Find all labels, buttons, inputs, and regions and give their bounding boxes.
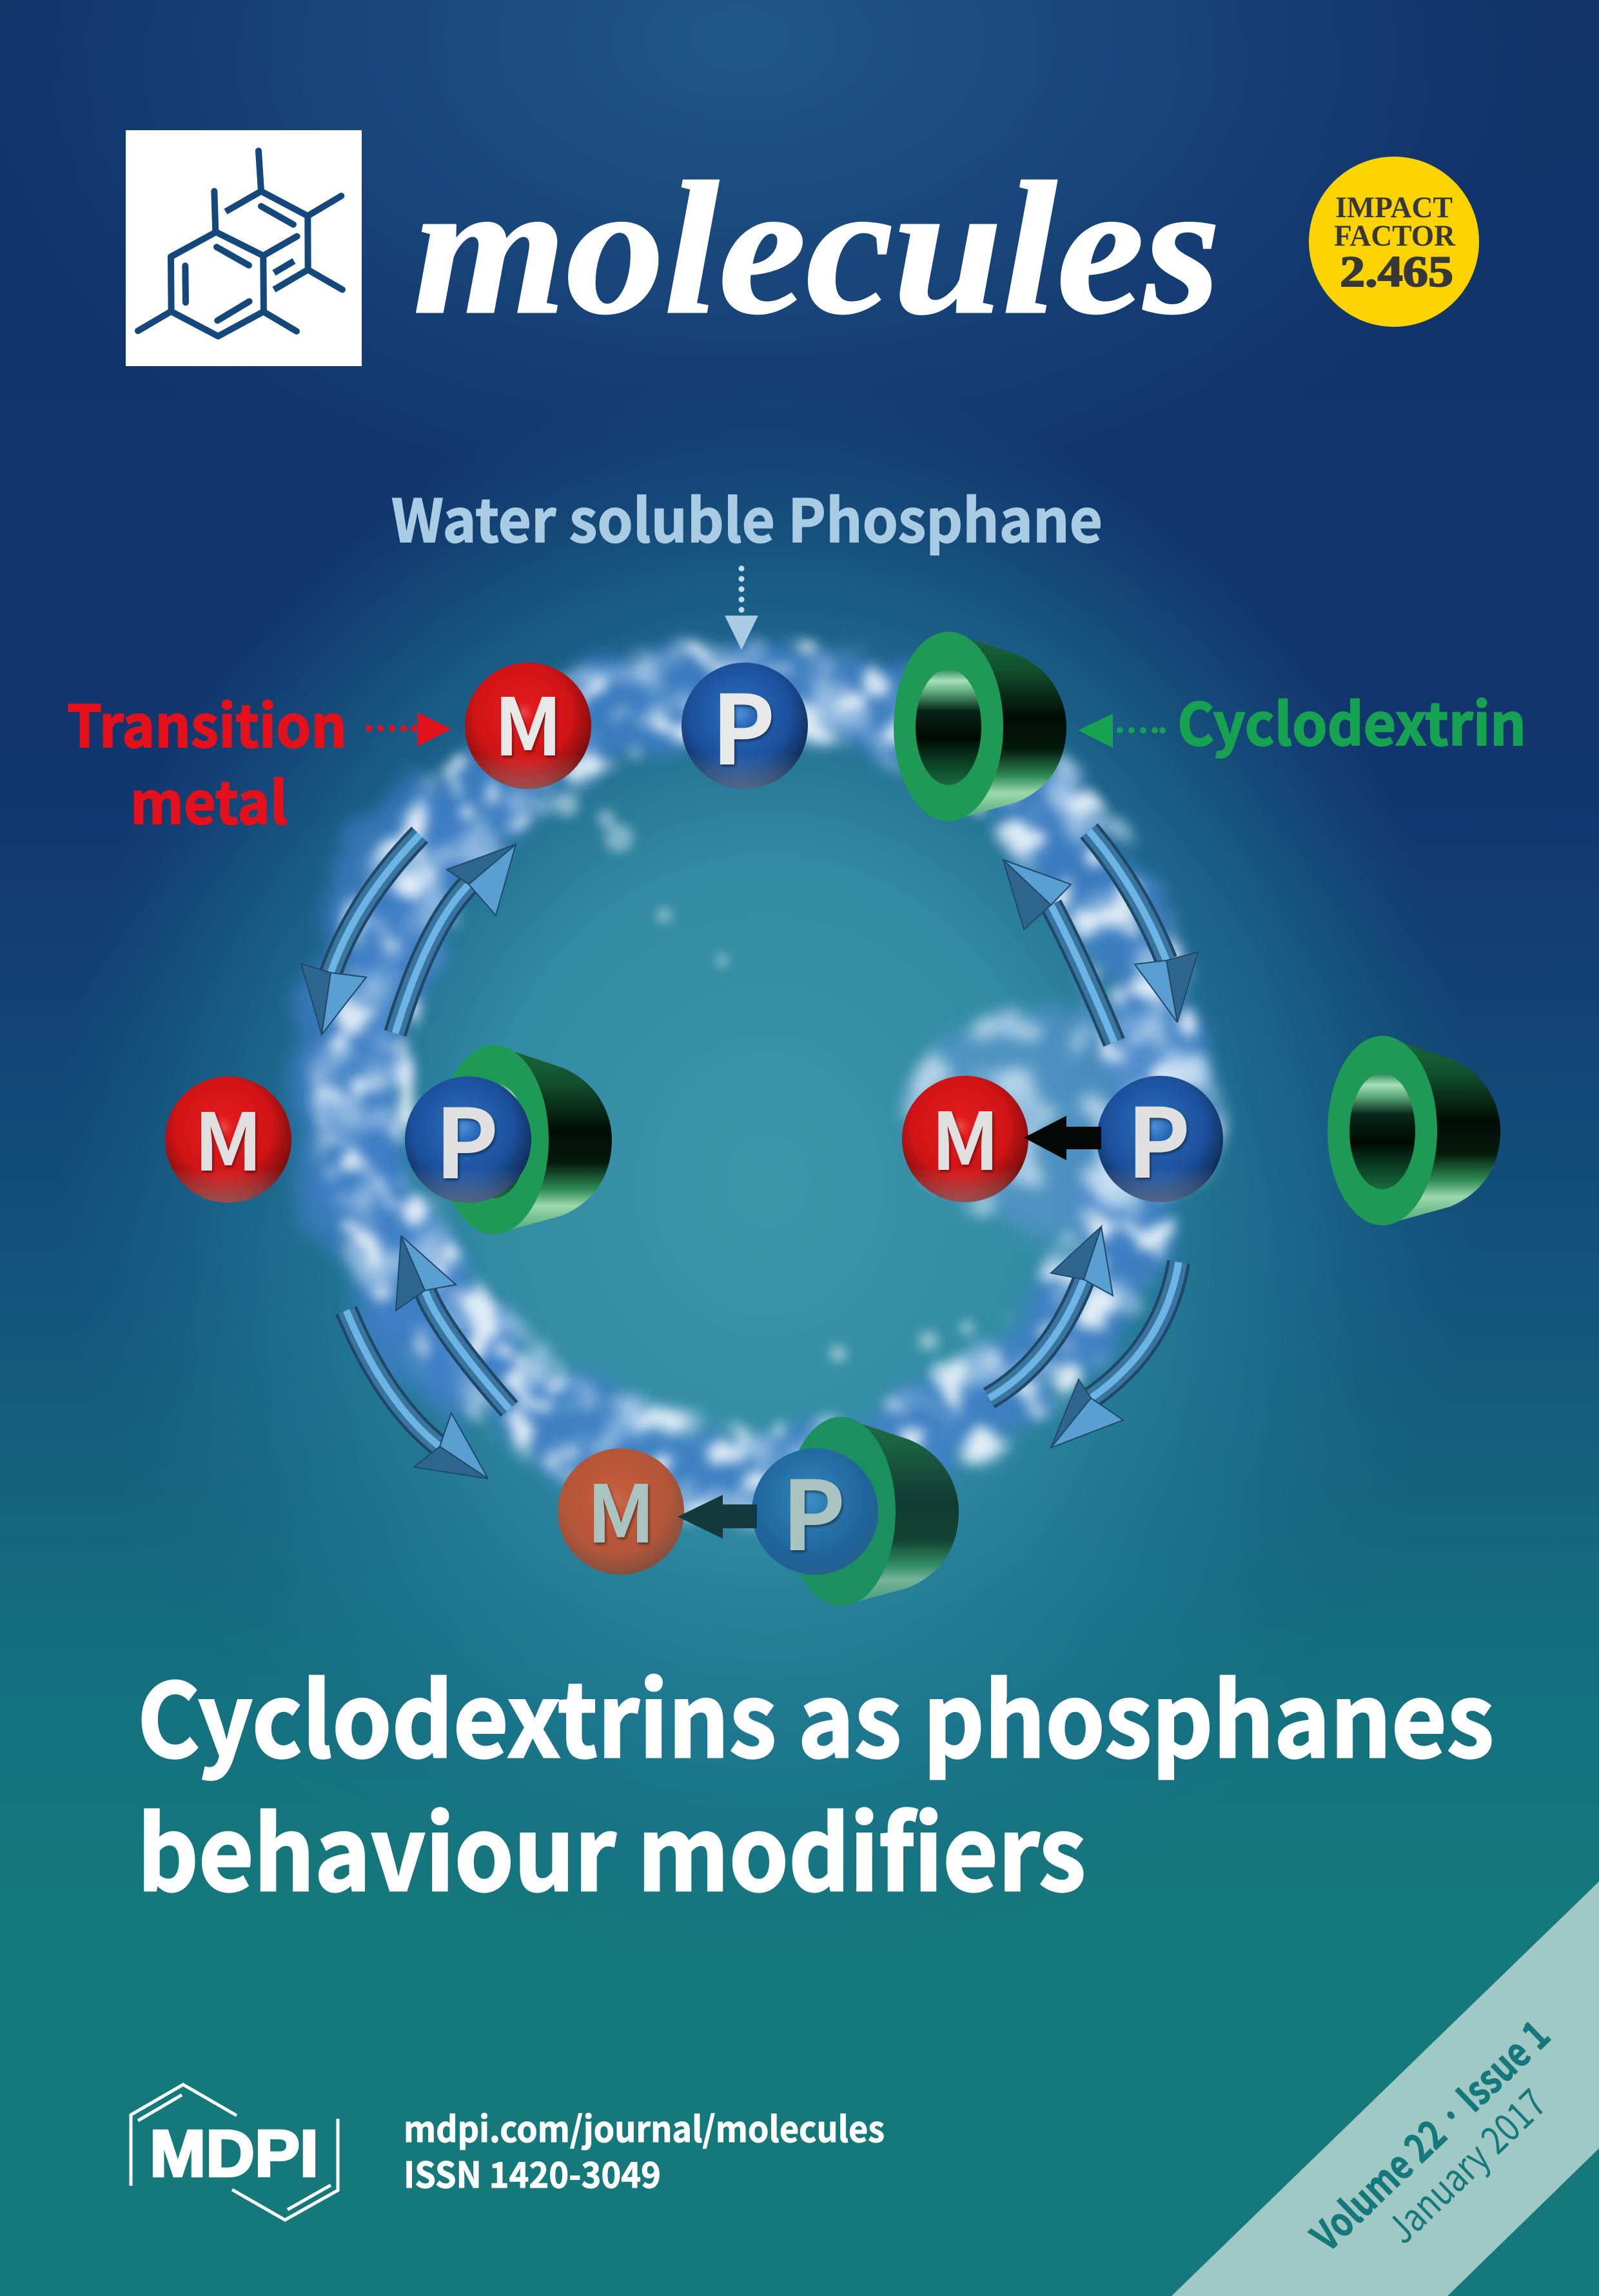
arrow: cyclodextrin pointer [1078, 714, 1166, 748]
sphere: metal left [165, 1076, 291, 1203]
sphere: metal left: M [194, 1079, 262, 1194]
impact factor badge [1309, 157, 1479, 327]
curved arrow: bottom-left inner [396, 1236, 509, 1409]
label: transition metal [67, 680, 347, 841]
impact factor badge: 2.465 [1340, 247, 1453, 296]
sphere: phosphane top [682, 653, 808, 792]
impact factor badge: IMPACT [1335, 191, 1453, 224]
water ring [343, 686, 1225, 1473]
curved arrow: top-right outer [1089, 831, 1198, 1022]
sphere: metal right [902, 1076, 1028, 1202]
label: transition metal: Transition [67, 680, 347, 764]
sphere: metal top [465, 663, 591, 789]
panel: reaction cycle [67, 474, 1526, 1606]
headline: Cyclodextrins as phosphanes [137, 1639, 1494, 1787]
curved arrow: top-right inner [1003, 860, 1114, 1042]
impact factor badge: FACTOR [1334, 219, 1456, 253]
curved arrow: top-left inner [395, 844, 516, 1033]
curved arrow: top-left outer [301, 835, 420, 1035]
journal logo box [126, 130, 362, 366]
cyclodextrin ring: top [894, 632, 1066, 821]
sphere: phosphane bottom: P [781, 1439, 846, 1578]
arrow: phosphane to metal bottom [678, 1495, 757, 1539]
cyclodextrin ring: left with phosphane [439, 1045, 612, 1234]
volume banner [1172, 1882, 1599, 2296]
sphere: phosphane right: P [1126, 1066, 1191, 1205]
label: cyclodextrin: Cyclodextrin [1177, 678, 1526, 762]
arrow: phosphane pointer [725, 566, 758, 650]
headline [137, 1639, 1494, 1920]
curved arrow: bottom-right outer [1051, 1262, 1179, 1448]
label: transition metal: metal [130, 757, 288, 841]
sphere: metal top: M [494, 664, 562, 779]
sphere: phosphane left [405, 1067, 531, 1206]
cyclodextrin ring: free right [1328, 1036, 1500, 1225]
MDPI logo: MDPI [150, 2117, 319, 2190]
sphere: phosphane right [1097, 1066, 1223, 1205]
sphere: metal bottom [558, 1448, 684, 1575]
curved arrow: bottom-left outer [346, 1310, 488, 1479]
arrow: transition metal pointer [366, 712, 451, 746]
sphere: metal right: M [931, 1078, 999, 1193]
journal url and ISSN: ISSN 1420-3049 [404, 2146, 661, 2198]
journal url and ISSN: mdpi.com/journal/molecules [404, 2101, 885, 2152]
journal url and ISSN [404, 2101, 885, 2198]
sphere: metal bottom: M [587, 1451, 655, 1566]
journal title: molecules [413, 143, 1221, 353]
volume banner: January 2017 [1373, 2074, 1557, 2254]
label: water soluble phosphane: Water soluble Phosphane [391, 474, 1103, 559]
arrow: phosphane to metal right [1024, 1116, 1101, 1160]
sphere: phosphane left: P [435, 1067, 499, 1206]
sphere: phosphane bottom [752, 1439, 878, 1578]
curved arrow: bottom-right inner [989, 1227, 1113, 1398]
cyclodextrin ring: bottom with phosphane [786, 1417, 959, 1606]
MDPI logo [131, 2085, 338, 2220]
headline: behaviour modifiers [137, 1773, 1086, 1920]
sphere: phosphane top: P [711, 653, 776, 792]
